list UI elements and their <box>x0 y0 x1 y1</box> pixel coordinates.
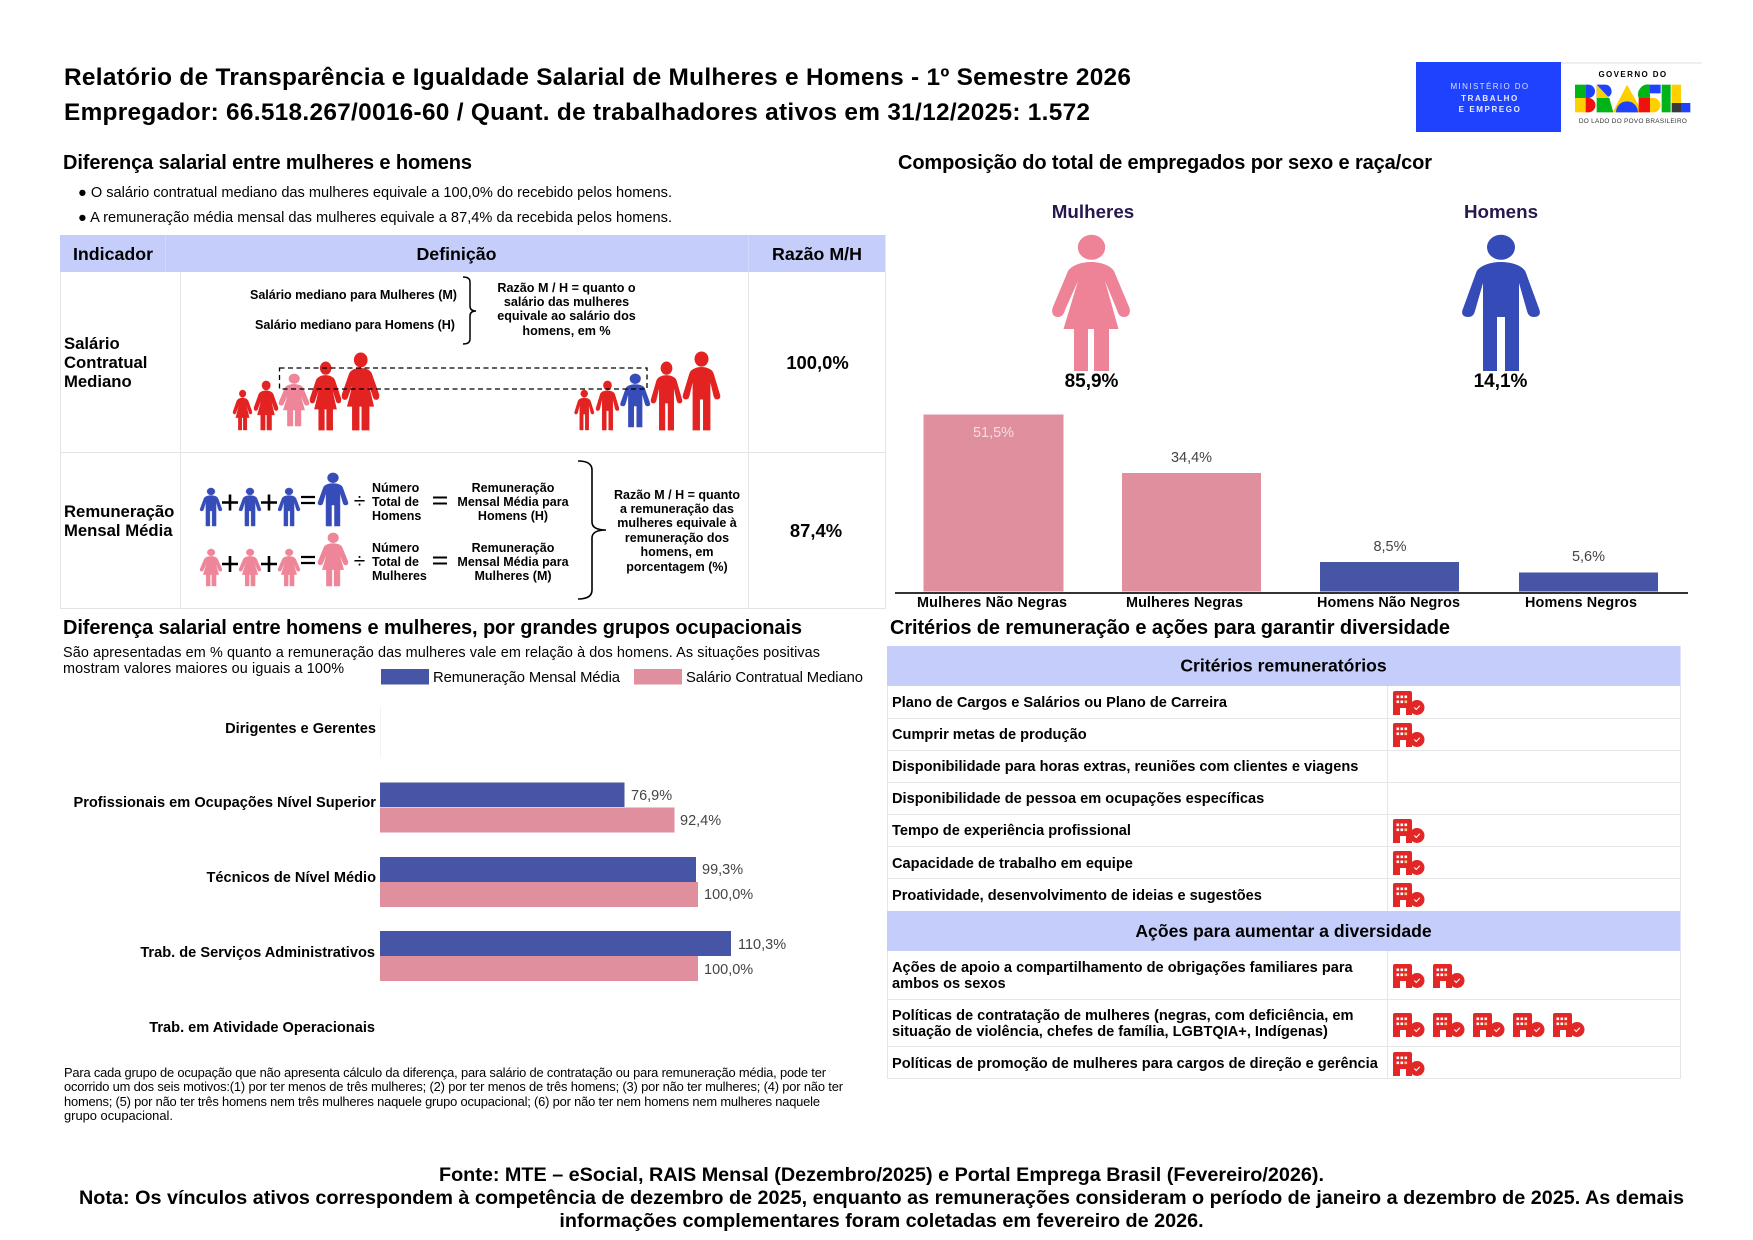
action rows: Políticas de promoção de mulheres para cargos de direção e gerência <box>892 1056 1379 1072</box>
logo: ministério e governo: GOVERNO DO <box>1598 70 1668 79</box>
action rows: situação de violência, chefes de família, LGBTQIA+, Indígenas) <box>892 1024 1328 1040</box>
row: salário contratual mediano label: Contratual <box>64 353 147 372</box>
bar chart: grupos ocupacionais: Técnicos de Nível Médio <box>206 870 376 886</box>
formula: mulheres: Número <box>372 541 420 555</box>
pictogram: mulheres <box>1052 201 1134 392</box>
row: salário contratual mediano label: Mediano <box>64 372 132 391</box>
title: Empregador: 66.518.267/0016-60 / Quant. de trabalhadores ativos em 31/12/2025: 1.572 <box>64 99 1090 126</box>
criteria rows: Disponibilidade de pessoa em ocupações específicas <box>892 791 1264 807</box>
title: Relatório de Transparência e Igualdade Salarial de Mulheres e Homens - 1º Semestre 2026 <box>64 64 1131 91</box>
formula: homens: Remuneração <box>472 481 555 495</box>
action rows <box>892 960 1379 1072</box>
footer: fonte e nota <box>79 1164 1684 1232</box>
figures: men <box>575 352 720 430</box>
value: 100,0%: 100,0% <box>786 352 849 373</box>
logo: ministério e governo: DO LADO DO POVO BRASILEIRO <box>1579 118 1687 125</box>
pictogram: mulheres: 85,9% <box>1065 371 1119 392</box>
band: ações para aumentar a diversidade <box>887 911 1680 951</box>
action rows: Ações de apoio a compartilhamento de obrigações familiares para <box>892 960 1354 976</box>
heading: composição: Composição do total de empregados por sexo e raça/cor <box>898 152 1432 174</box>
bar chart: grupos ocupacionais: Trab. de Serviços Administrativos <box>140 945 375 961</box>
bar chart: grupos ocupacionais: 110,3% <box>738 937 786 953</box>
formula: mulheres: Mulheres <box>372 569 427 583</box>
bar chart: composição <box>895 414 1688 611</box>
legend: Salário Contratual Mediano <box>686 670 863 686</box>
razão explanation 2: homens, em <box>641 545 713 559</box>
value: 87,4%: 87,4% <box>790 520 842 541</box>
mediana labels: Salário mediano para Homens (H) <box>255 318 455 332</box>
pictogram: homens: Homens <box>1464 201 1538 222</box>
table header: Definição <box>416 244 497 264</box>
razão explanation: equivale ao salário dos <box>497 309 636 323</box>
formula: homens: Homens (H) <box>478 509 548 523</box>
subtitle text: mostram valores maiores ou iguais a 100% <box>63 661 344 677</box>
bar chart: composição: 34,4% <box>1171 450 1212 466</box>
formula: mulheres <box>200 533 570 586</box>
formula: mulheres: ÷ <box>354 550 365 573</box>
formula: homens: ÷ <box>354 490 365 513</box>
note: grupo ocupacional. <box>64 1108 173 1123</box>
bar chart: composição: 51,5% <box>973 425 1014 441</box>
footer: fonte e nota: informações complementares foram coletadas em fevereiro de 2026. <box>559 1210 1204 1232</box>
formula: mulheres: Total de <box>372 555 419 569</box>
table header <box>60 235 886 272</box>
figures: women <box>233 353 379 430</box>
heading: diferença por grupos: Diferença salarial entre homens e mulheres, por grandes grupos ocupacionais <box>63 617 802 639</box>
subtitle text <box>63 645 820 677</box>
formula: homens: Homens <box>372 509 421 523</box>
razão explanation 2: a remuneração das <box>620 502 734 516</box>
bullets: ● O salário contratual mediano das mulheres equivale a 100,0% do recebido pelos homens. <box>78 185 672 201</box>
bar chart: composição: Mulheres Negras <box>1126 595 1243 611</box>
band: critérios remuneratórios <box>887 646 1680 686</box>
note: Para cada grupo de ocupação que não apresenta cálculo da diferença, para salário de contratação ou para remuneração média, pode ter <box>64 1065 827 1080</box>
subtitle text: São apresentadas em % quanto a remuneração das mulheres vale em relação à dos homens. As situações positivas <box>63 645 820 661</box>
bar chart: grupos ocupacionais: 76,9% <box>631 788 672 804</box>
logo: ministério e governo: E EMPREGO <box>1459 105 1521 114</box>
razão explanation <box>497 281 636 338</box>
bar chart: composição: Mulheres Não Negras <box>917 595 1067 611</box>
icons: critérios <box>1393 691 1424 907</box>
large brace <box>578 461 606 599</box>
footer: fonte e nota: Nota: Os vínculos ativos correspondem à competência de dezembro de 2025, enquanto as remunerações consideram o período de janeiro a dezembro de 2025. As demais <box>79 1187 1684 1209</box>
note <box>64 1065 844 1123</box>
razão explanation 2: porcentagem (%) <box>626 560 728 574</box>
icons: ações <box>1393 964 1584 1076</box>
formula: homens: Total de <box>372 495 419 509</box>
row: remuneração mensal média label <box>64 502 174 540</box>
formula: homens: Número <box>372 481 420 495</box>
legend <box>381 669 863 686</box>
razão explanation 2: Razão M / H = quanto <box>614 488 740 502</box>
mediana labels <box>250 288 457 332</box>
formula: mulheres: Remuneração <box>472 541 555 555</box>
heading: critérios: Critérios de remuneração e ações para garantir diversidade <box>890 617 1450 639</box>
razão explanation 2 <box>614 488 740 574</box>
criteria rows: Tempo de experiência profissional <box>892 823 1131 839</box>
razão explanation: salário das mulheres <box>504 295 629 309</box>
criteria rows: Cumprir metas de produção <box>892 727 1087 743</box>
bar chart: grupos ocupacionais: Dirigentes e Gerentes <box>225 721 376 737</box>
logo: ministério e governo: TRABALHO <box>1461 94 1519 103</box>
bullets <box>78 185 672 226</box>
bar chart: grupos ocupacionais: Trab. em Atividade Operacionais <box>149 1020 375 1036</box>
title <box>64 64 1131 126</box>
razão explanation 2: mulheres equivale à <box>617 516 737 530</box>
pictogram: homens: 14,1% <box>1474 371 1528 392</box>
formula: mulheres: Mulheres (M) <box>474 569 552 583</box>
bar chart: grupos ocupacionais: 99,3% <box>702 862 743 878</box>
razão explanation: Razão M / H = quanto o <box>497 281 636 295</box>
mediana labels: Salário mediano para Mulheres (M) <box>250 288 457 302</box>
table header: Indicador <box>73 244 153 264</box>
bar chart: grupos ocupacionais: Profissionais em Ocupações Nível Superior <box>73 795 376 811</box>
heading: diferença salarial: Diferença salarial entre mulheres e homens <box>63 152 472 174</box>
bar chart: grupos ocupacionais: 92,4% <box>680 813 721 829</box>
row: remuneração mensal média label: Mensal Média <box>64 521 173 540</box>
formula: homens: Mensal Média para <box>457 495 570 509</box>
table header: Razão M/H <box>772 244 862 264</box>
criteria rows <box>892 695 1358 904</box>
bar chart: grupos ocupacionais: 100,0% <box>704 887 753 903</box>
row: remuneração mensal média label: Remuneração <box>64 502 174 521</box>
band: critérios remuneratórios: Critérios remuneratórios <box>1180 656 1387 676</box>
brace <box>463 277 476 344</box>
bar chart: composição: Homens Não Negros <box>1317 595 1460 611</box>
footer: fonte e nota: Fonte: MTE – eSocial, RAIS Mensal (Dezembro/2025) e Portal Emprega Brasil (Fevereiro/2026). <box>439 1164 1324 1186</box>
pictogram: homens <box>1462 201 1540 392</box>
note: homens; (5) por não ter três homens nem três mulheres naquele grupo ocupacional; (6) por não ter nem homens nem mulheres naquele <box>64 1094 820 1109</box>
razão explanation 2: remuneração dos <box>625 531 729 545</box>
logo: ministério e governo <box>1416 62 1702 132</box>
dashed median box <box>280 368 647 389</box>
bar chart: grupos ocupacionais: 100,0% <box>704 962 753 978</box>
criteria rows: Capacidade de trabalho em equipe <box>892 856 1133 872</box>
bar chart: composição: 8,5% <box>1373 539 1407 555</box>
action rows: Políticas de contratação de mulheres (negras, com deficiência, em <box>892 1008 1354 1024</box>
row: salário contratual mediano label <box>64 334 147 391</box>
logo: ministério e governo: MINISTÉRIO DO <box>1450 82 1530 91</box>
band: ações para aumentar a diversidade: Ações para aumentar a diversidade <box>1135 921 1432 941</box>
legend: Remuneração Mensal Média <box>433 670 621 686</box>
formula: homens <box>200 473 570 526</box>
bar chart: grupos ocupacionais <box>73 706 786 1036</box>
panel: critérios e ações table <box>887 646 1681 1078</box>
bar chart: composição: 5,6% <box>1572 549 1605 565</box>
panel: tabela de indicadores <box>60 235 886 608</box>
formula: mulheres: Mensal Média para <box>457 555 570 569</box>
criteria rows: Proatividade, desenvolvimento de ideias e sugestões <box>892 888 1262 904</box>
bar chart: composição: Homens Negros <box>1525 595 1637 611</box>
bullets: ● A remuneração média mensal das mulheres equivale a 87,4% da recebida pelos homens. <box>78 210 672 226</box>
criteria rows: Plano de Cargos e Salários ou Plano de Carreira <box>892 695 1228 711</box>
action rows: ambos os sexos <box>892 976 1006 992</box>
row: salário contratual mediano label: Salário <box>64 334 120 353</box>
pictogram: mulheres: Mulheres <box>1052 201 1134 222</box>
razão explanation: homens, em % <box>522 324 611 338</box>
note: ocorrido um dos seis motivos:(1) por ter menos de três mulheres; (2) por ter menos de três homens; (3) por não ter mulheres; (4) por não ter <box>64 1079 844 1094</box>
criteria rows: Disponibilidade para horas extras, reuniões com clientes e viagens <box>892 759 1358 775</box>
